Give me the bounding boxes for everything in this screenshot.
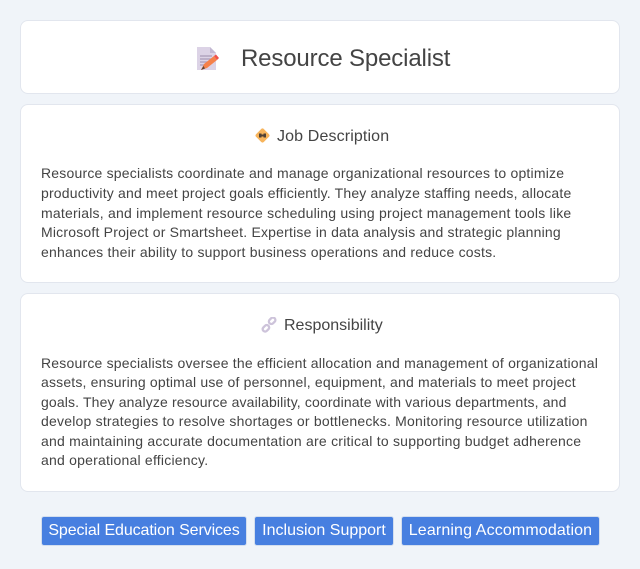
text: job description body: enhances their ability to support business operations and reduce costs. [41, 244, 496, 260]
tag: special education services: Special Education Services [48, 522, 240, 539]
text: job description body: materials, and implement resource scheduling using project management tools like [41, 205, 571, 221]
text: job description body: Resource specialists coordinate and manage organizational resources to optimize [41, 165, 564, 181]
text: job description body: Microsoft Project or Smartsheet. Expertise in data analysis and strategic planning [41, 224, 561, 240]
heading: job description: Job Description [277, 128, 389, 145]
text: job description body [41, 165, 571, 260]
title text: Resource Specialist [241, 45, 450, 72]
text: responsibility body: and operational efficiency. [41, 452, 208, 468]
icon: document with pencil [197, 47, 219, 70]
tag: learning accommodation: Learning Accommodation [409, 522, 592, 539]
tag: inclusion support: Inclusion Support [262, 522, 386, 539]
text: responsibility body: assets, ensuring optimal use of personnel, equipment, and materials to meet project [41, 374, 576, 390]
tag: learning accommodation [401, 516, 600, 546]
text: responsibility body: goals. They analyze resource availability, coordinate with various departments, and [41, 394, 566, 410]
text: responsibility body: develop strategies to resolve shortages or bottlenecks. Monitoring resource utilization [41, 413, 588, 429]
icon: chain link [262, 317, 276, 333]
text: job description body: productivity and meet project goals efficiently. They analyze staffing needs, allocate [41, 185, 571, 201]
text: responsibility body: Resource specialists oversee the efficient allocation and management of organizational [41, 355, 598, 371]
tag: inclusion support [254, 516, 394, 546]
panel: title [20, 20, 620, 94]
icon: job description diamond [256, 128, 270, 143]
text: responsibility body [41, 355, 598, 468]
panel: responsibility [20, 293, 620, 492]
tag: special education services [41, 516, 247, 546]
text: responsibility body: and maintaining accurate documentation are critical to supporting budget adherence [41, 433, 581, 449]
heading: responsibility: Responsibility [284, 317, 383, 334]
panel: job description [20, 104, 620, 283]
